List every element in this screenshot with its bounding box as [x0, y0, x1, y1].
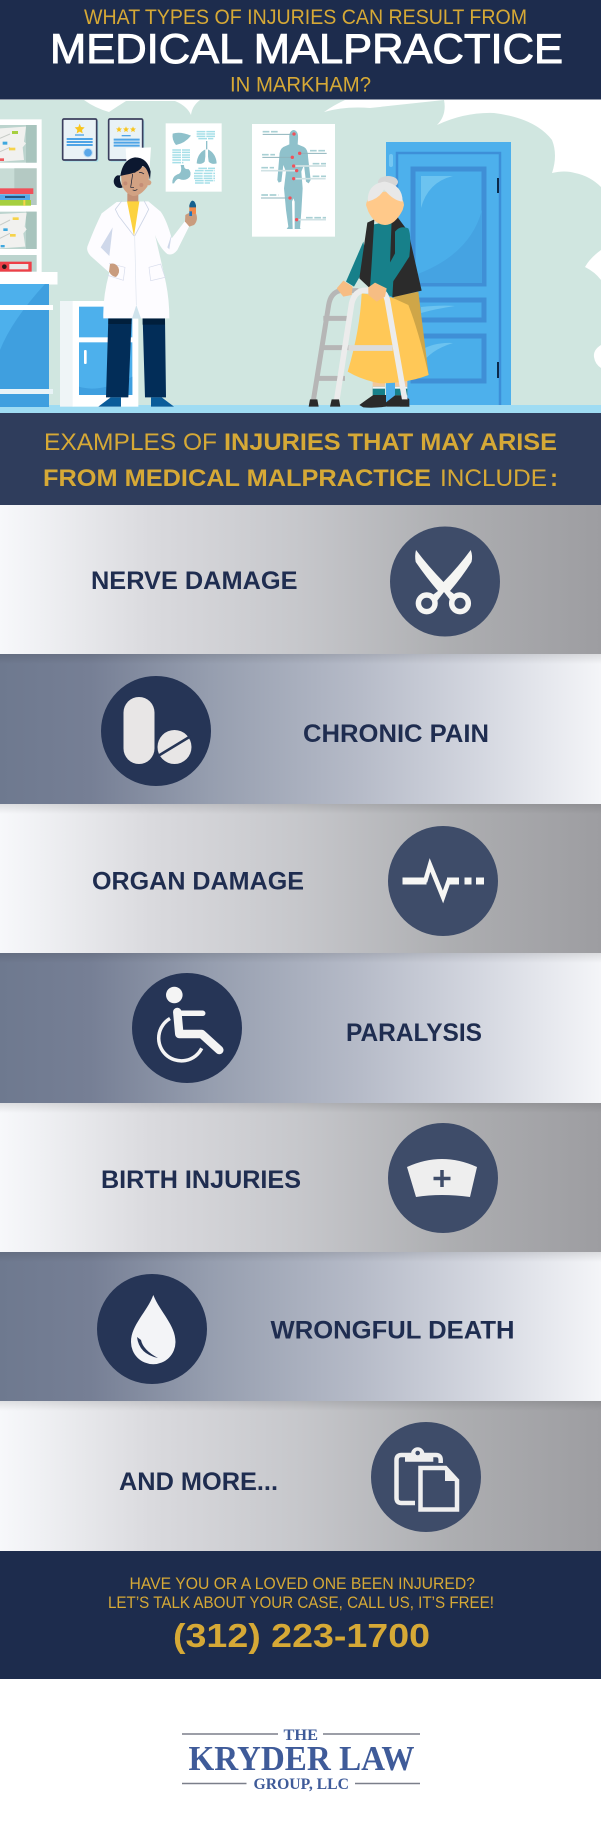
row: nerve damage [0, 505, 601, 654]
hands [109, 263, 119, 277]
doctor figure [87, 147, 197, 407]
teal torso [369, 221, 412, 297]
row: wrongful death [0, 1252, 601, 1401]
vest [359, 216, 422, 297]
hair [114, 175, 123, 188]
logo: The Kryder Law Group: KRYDER LAW [188, 1739, 414, 1778]
walker back frame [313, 291, 358, 401]
certificate two [109, 119, 144, 162]
row: organ damage: ORGAN DAMAGE [92, 868, 304, 896]
floor [0, 405, 601, 413]
walker feet [309, 399, 409, 407]
logo: The Kryder Law Group [182, 1727, 420, 1793]
poster: body chart [252, 124, 335, 237]
row: birth injuries: BIRTH INJURIES [101, 1166, 301, 1194]
hair [368, 176, 403, 202]
left arm [346, 242, 367, 287]
logo: The Kryder Law Group: GROUP, LLC [254, 1776, 349, 1793]
nurse cap [126, 147, 151, 172]
trousers [106, 318, 166, 397]
cabinet behind doctor [60, 301, 138, 407]
row: chronic pain [0, 654, 601, 804]
right arm [376, 227, 410, 293]
head [366, 192, 404, 225]
row: chronic pain: CHRONIC PAIN [303, 720, 489, 748]
skirt [348, 293, 429, 383]
footer text line two: LET’S TALK ABOUT YOUR CASE, CALL US, IT’S FREE! [108, 1593, 494, 1612]
footer call to action [0, 1551, 601, 1679]
band heading line one: EXAMPLES OF [44, 429, 217, 456]
row: and more: AND MORE... [119, 1468, 278, 1496]
header line: in Markham: IN MARKHAM? [230, 74, 371, 96]
band heading line two: : [550, 465, 558, 492]
certificate one [63, 119, 98, 162]
icon: scissors [390, 526, 500, 636]
shelf unit [0, 119, 42, 273]
door [386, 142, 511, 405]
icon: drop [97, 1274, 207, 1384]
icon: heartbeat [388, 826, 498, 936]
mint cloud wall [0, 100, 601, 406]
footer text line one: HAVE YOU OR A LOVED ONE BEEN INJURED? [130, 1574, 475, 1593]
band heading line two: INCLUDE [440, 465, 547, 492]
row: organ damage [0, 804, 601, 953]
row: wrongful death: WRONGFUL DEATH [270, 1316, 514, 1344]
header panel [0, 0, 601, 100]
illustration: clinic scene [0, 100, 601, 413]
band heading line one: INJURIES THAT MAY ARISE [224, 429, 557, 456]
pockets [107, 263, 165, 281]
patient with walker [309, 176, 429, 408]
band heading line two: FROM MEDICAL MALPRACTICE [43, 465, 431, 492]
icon: nurse cap [388, 1123, 498, 1233]
legs [373, 380, 407, 397]
neck [127, 193, 138, 205]
lapels [115, 201, 149, 236]
row: paralysis [0, 953, 601, 1103]
skirt shade [393, 292, 429, 379]
row: and more [0, 1401, 601, 1551]
shoes [359, 395, 409, 408]
counter cabinet [0, 272, 58, 407]
row: nerve damage: NERVE DAMAGE [91, 567, 298, 595]
shirt [127, 201, 139, 236]
walker front frame [337, 290, 405, 401]
title: MEDICAL MALPRACTICE [50, 25, 563, 72]
phone number: (312) 223-1700 [173, 1617, 430, 1654]
shoes [98, 397, 174, 407]
row: birth injuries [0, 1103, 601, 1252]
poster: organs [166, 123, 222, 192]
icon: pills [101, 676, 211, 786]
row: paralysis: PARALYSIS [346, 1019, 482, 1047]
coat [87, 201, 189, 318]
logo: The Kryder Law Group: THE [284, 1727, 318, 1744]
icon: clipboard [371, 1422, 481, 1532]
examples band [0, 413, 601, 506]
icon: wheelchair [132, 973, 242, 1083]
hands [337, 281, 387, 302]
head [121, 166, 149, 196]
header line: what types: WHAT TYPES OF INJURIES CAN RESULT FROM [84, 6, 527, 29]
band heading line one [44, 429, 557, 456]
pill bottle [189, 201, 196, 216]
